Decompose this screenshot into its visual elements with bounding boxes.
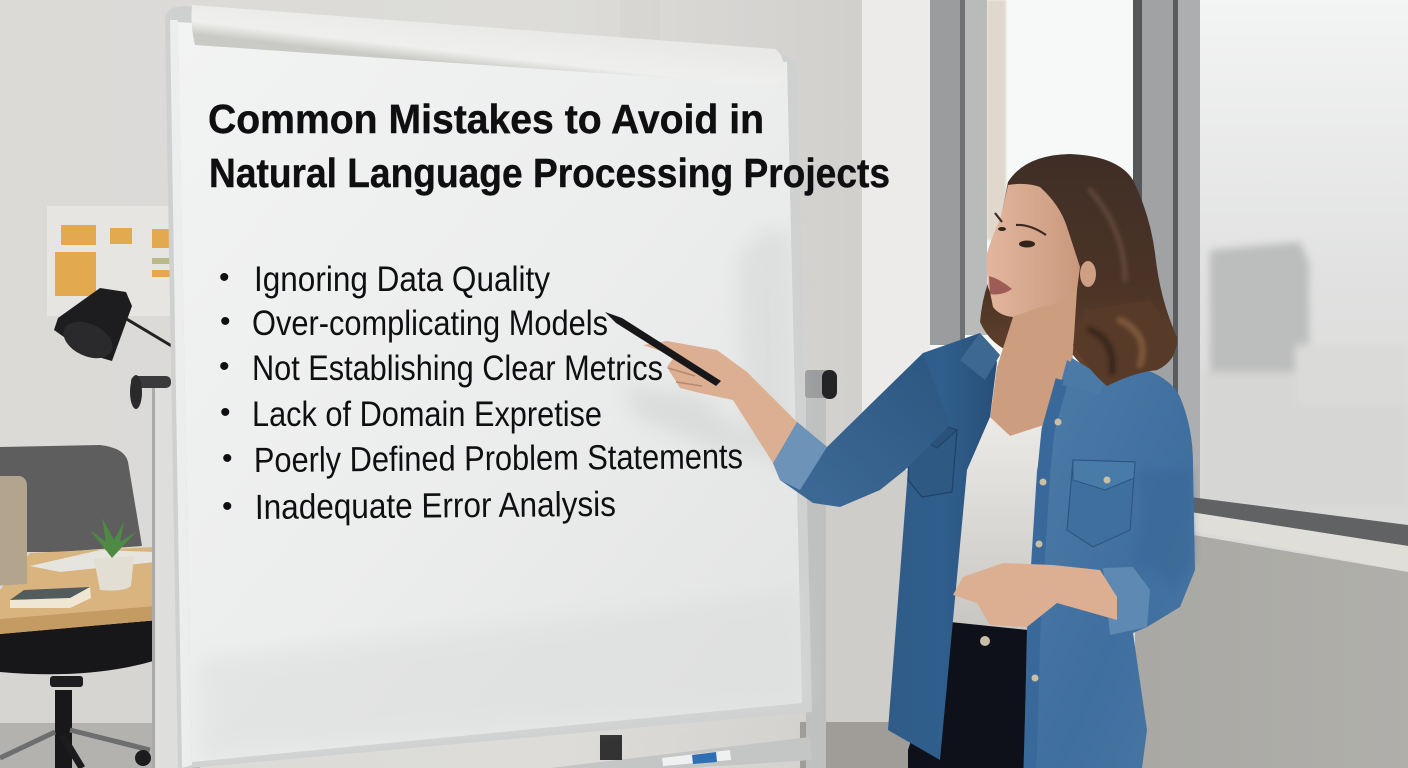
- neck: [990, 290, 1077, 436]
- window frames: [930, 0, 960, 345]
- shirt buttons: [928, 418, 1110, 682]
- desk with laptop, plant and book: [0, 476, 180, 634]
- pinboard on wall: [47, 206, 177, 316]
- list of mistakes: [219, 260, 743, 527]
- resting hand and forearm: [953, 563, 1117, 627]
- mistake 4: •: [220, 396, 231, 429]
- whiteboard surface: [178, 22, 802, 762]
- mistake 3: •: [219, 350, 230, 383]
- white t-shirt: [950, 417, 1050, 630]
- wall column: [862, 0, 932, 480]
- mistake 1: •: [219, 261, 230, 294]
- title: [208, 96, 890, 196]
- marker on tray: [662, 750, 731, 766]
- title: Common Mistakes to Avoid in: [208, 96, 764, 142]
- hair highlights: [1090, 190, 1142, 372]
- mistake 3: Not Establishing Clear Metrics: [252, 349, 663, 388]
- mistake 6: •: [222, 490, 233, 523]
- trousers: [908, 620, 1028, 768]
- eyes, brows, mouth: [989, 213, 1046, 294]
- pencil: [605, 312, 721, 386]
- shirt placket: [1030, 380, 1062, 768]
- mistake 2: •: [220, 305, 231, 338]
- office chair: [0, 445, 160, 768]
- collar: [960, 333, 1105, 395]
- forearm and pointing hand: [643, 341, 797, 463]
- title: Natural Language Processing Projects: [209, 150, 890, 196]
- paper roll: [191, 5, 784, 85]
- right sleeve shading: [1130, 470, 1193, 590]
- window with city view: [930, 0, 1408, 572]
- mistake 6: Inadequate Error Analysis: [255, 485, 616, 527]
- distant building: [1210, 242, 1309, 372]
- mistake 1: Ignoring Data Quality: [254, 260, 550, 299]
- ear: [1080, 261, 1096, 287]
- pointing arm sleeve: [773, 353, 950, 507]
- background: office wall: [0, 0, 940, 768]
- mistake 5: •: [222, 442, 233, 475]
- denim shirt left panel: [888, 333, 997, 760]
- finger shadows: [668, 368, 702, 386]
- sleeve cuff: [773, 422, 827, 490]
- mistake 5: Poerly Defined Problem Statements: [254, 437, 743, 480]
- hair back: [980, 154, 1177, 386]
- flipchart easel: [130, 6, 837, 768]
- book on desk: [10, 587, 91, 608]
- denim shirt right panel: [1024, 360, 1195, 768]
- chest pockets: [908, 415, 1135, 547]
- board reflection: [200, 229, 803, 760]
- mistake 2: Over-complicating Models: [252, 304, 608, 343]
- face: [986, 184, 1080, 317]
- presenter: [605, 154, 1195, 768]
- hair lock over shoulder: [1073, 300, 1177, 386]
- mistake 4: Lack of Domain Expretise: [252, 395, 602, 434]
- resting sleeve cuff: [1103, 567, 1150, 635]
- lower wall under window: [1135, 525, 1408, 768]
- desk lamp: [54, 288, 175, 365]
